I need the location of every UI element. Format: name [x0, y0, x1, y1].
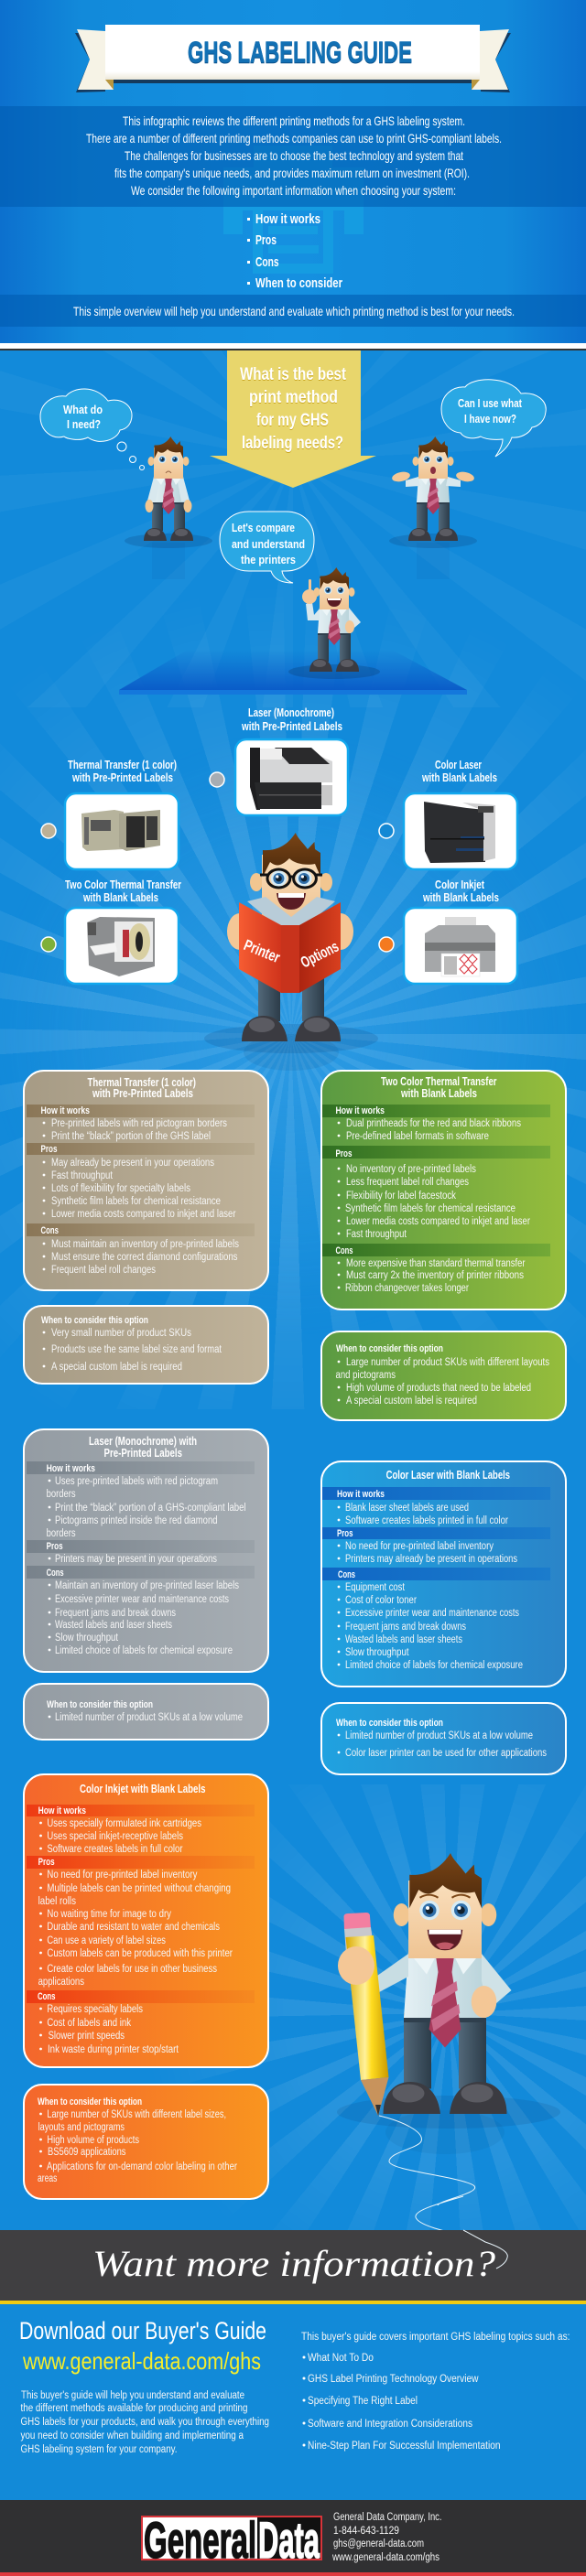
- pros: Can use a variety of label sizes: [47, 1935, 166, 1946]
- panel title: Thermal Transfer (1 color): [88, 1076, 196, 1089]
- panel: two color when to consider: and pictograms: [335, 1370, 396, 1381]
- cons: Ribbon changeover takes longer: [345, 1283, 469, 1294]
- pros: Durable and resistant to water and chemicals: [47, 1922, 220, 1933]
- pros: No need for pre-printed label inventory: [345, 1541, 494, 1552]
- panel: color laser when to consider: When to consider this option: [336, 1718, 443, 1729]
- book cover: Printer: [242, 936, 283, 966]
- cons: Cons: [40, 1225, 59, 1236]
- pros: Pros: [38, 1857, 55, 1868]
- printer card: two color thermal: [65, 908, 179, 984]
- how it works: Dual printheads for the red and black ribbons: [346, 1118, 521, 1129]
- consideration list: Cons: [255, 254, 278, 270]
- speech bubble: compare: Let's compare: [232, 522, 295, 534]
- contact details: General Data Company, Inc.: [333, 2512, 441, 2523]
- printer label: color inkjet: Color Inkjet: [435, 878, 485, 891]
- pros: Lower media costs compared to inkjet and laser: [346, 1216, 530, 1227]
- how it works: [38, 1805, 201, 1855]
- cons: Ink waste during printer stop/start: [48, 2044, 179, 2055]
- guide description: [20, 2390, 269, 2455]
- printer label: color inkjet: [422, 878, 499, 904]
- pros: Pros: [47, 1541, 63, 1552]
- cons: Limited choice of labels for chemical exposure: [55, 1645, 233, 1656]
- logo: General: [144, 2511, 256, 2569]
- how it works: Uses special inkjet-receptive labels: [47, 1831, 183, 1842]
- panel: color inkjet when to consider: areas: [38, 2173, 58, 2184]
- panel: color inkjet when to consider: Applications for on-demand color labeling in other: [47, 2161, 237, 2172]
- cons: Frequent label roll changes: [51, 1265, 156, 1276]
- guide topics: What Not To Do: [308, 2353, 374, 2364]
- thought bubble: What do: [63, 403, 103, 416]
- cons: Must carry 2x the inventory of printer ribbons: [346, 1270, 524, 1281]
- panel title: Two Color Thermal Transfer: [381, 1075, 497, 1088]
- book cover: Options: [298, 938, 342, 972]
- panel: color inkjet: [24, 1774, 268, 2067]
- pros: Pros: [337, 1528, 353, 1539]
- printer label: thermal transfer: with Pre-Printed Labels: [71, 771, 173, 784]
- question arrow: What is the best: [240, 365, 347, 384]
- question arrow: print method: [249, 388, 338, 407]
- panel title: with Blank Labels: [400, 1087, 477, 1100]
- printer label: color laser: with Blank Labels: [421, 771, 497, 784]
- pros: May already be present in your operations: [51, 1158, 214, 1169]
- speech bubble: compare: and understand: [232, 538, 305, 551]
- printer card: color inkjet: [404, 908, 517, 984]
- pros: Pros: [40, 1144, 57, 1155]
- cons: Must maintain an inventory of pre-printed labels: [51, 1239, 239, 1250]
- speech bubble: can I use: [441, 380, 546, 457]
- guide topics: [301, 2332, 570, 2452]
- pros: applications: [38, 1977, 84, 1988]
- status dot: green: [41, 937, 56, 952]
- pros: Fast throughput: [346, 1229, 407, 1240]
- panel: color inkjet when to consider: Large number of SKUs with different label sizes,: [47, 2109, 226, 2120]
- cons: Equipment cost: [345, 1582, 406, 1593]
- panel: color inkjet when to consider: When to consider this option: [38, 2096, 142, 2107]
- cons: Cons: [338, 1569, 355, 1580]
- cons: [40, 1225, 239, 1276]
- intro text: [86, 113, 502, 198]
- panel: laser monochrome when to consider: [24, 1684, 268, 1740]
- pros: Create color labels for use in other business: [47, 1964, 217, 1975]
- pros: Printers may be present in your operations: [55, 1554, 217, 1565]
- question arrow: [210, 350, 376, 488]
- how it works: [335, 1105, 521, 1142]
- pros: Pros: [335, 1148, 352, 1159]
- cons: Slow throughput: [55, 1633, 119, 1644]
- how it works: How it works: [38, 1805, 86, 1816]
- pros: Custom labels can be produced with this printer: [47, 1948, 233, 1959]
- how it works: Software creates labels printed in full color: [345, 1515, 508, 1526]
- panel: two color when to consider: High volume of products that need to be labeled: [346, 1383, 531, 1394]
- cons: Excessive printer wear and maintenance costs: [345, 1608, 519, 1619]
- printer label: two color thermal: [65, 878, 181, 904]
- guide topics: Software and Integration Considerations: [308, 2419, 472, 2430]
- pros: No inventory of pre-printed labels: [346, 1164, 476, 1175]
- how it works: Uses specially formulated ink cartridges: [47, 1818, 201, 1829]
- buyer's guide section: [0, 2304, 586, 2500]
- consideration list: When to consider: [255, 275, 342, 291]
- speech bubble: can I use: Can I use what: [458, 397, 523, 410]
- printer label: color inkjet: with Blank Labels: [422, 891, 499, 904]
- panel: color inkjet when to consider: High volume of products: [47, 2135, 139, 2146]
- pros: [335, 1148, 530, 1240]
- pros: Lots of flexibility for specialty labels: [51, 1183, 190, 1194]
- conclusion band: [0, 295, 586, 327]
- intro text: The challenges for businesses are to choose the best technology and system that: [125, 148, 463, 163]
- panel title: Color Inkjet with Blank Labels: [80, 1783, 206, 1795]
- guide description: GHS labeling system for your company.: [20, 2444, 178, 2455]
- printer label: thermal transfer: [68, 759, 177, 784]
- panel title: [88, 1076, 196, 1100]
- panel: two color when to consider: [321, 1331, 566, 1420]
- pros: Printers may already be present in operations: [345, 1554, 517, 1565]
- panel: two color thermal transfer: [321, 1071, 566, 1310]
- panel: color inkjet when to consider: [24, 2085, 268, 2199]
- panel: two color when to consider: A special custom label is required: [346, 1396, 477, 1407]
- how it works: How it works: [337, 1489, 385, 1500]
- cons: Slower print speeds: [49, 2031, 125, 2042]
- printer card: thermal transfer: [65, 793, 179, 869]
- guide description: the different methods available for producing and printing: [20, 2403, 247, 2414]
- pros: [38, 1857, 233, 1988]
- how it works: Pictograms printed inside the red diamond: [55, 1515, 218, 1526]
- panel title: [89, 1435, 197, 1460]
- want more information band: Want more information?: [92, 2243, 495, 2284]
- printer label: two color thermal: with Blank Labels: [82, 891, 158, 904]
- reader with printer options book: [204, 833, 378, 1071]
- cons: More expensive than standard thermal transfer: [346, 1258, 526, 1269]
- printer label: color laser: Color Laser: [435, 759, 482, 771]
- pros: Lower media costs compared to inkjet and laser: [51, 1209, 236, 1220]
- question arrow: for my GHS: [256, 411, 329, 430]
- intro band: [0, 106, 586, 207]
- panel title: Laser (Monochrome) with: [89, 1435, 197, 1448]
- cons: Limited choice of labels for chemical exposure: [345, 1660, 523, 1671]
- panel: thermal transfer when to consider: Very small number of product SKUs: [51, 1328, 191, 1339]
- intro text: This infographic reviews the different printing methods for a GHS labeling system.: [123, 113, 465, 128]
- panel title: Pre-Printed Labels: [104, 1447, 182, 1460]
- guide description: you need to consider when building and implementing a: [20, 2430, 244, 2441]
- how it works: Print the “black” portion of the GHS label: [51, 1131, 211, 1142]
- printer label: thermal transfer: Thermal Transfer (1 color): [68, 759, 177, 771]
- panel title: [381, 1075, 497, 1100]
- book cover: [239, 902, 342, 993]
- printer label: two color thermal: Two Color Thermal Transfer: [65, 878, 181, 891]
- cons: Maintain an inventory of pre-printed laser labels: [55, 1580, 239, 1591]
- printer label: laser monochrome: Laser (Monochrome): [248, 706, 334, 719]
- cons: Slow throughput: [345, 1647, 409, 1658]
- printer label: laser monochrome: [241, 706, 342, 733]
- how it works: Pre-printed labels with red pictogram borders: [51, 1118, 227, 1129]
- panel: two color when to consider: When to consider this option: [336, 1343, 443, 1354]
- contact details: ghs@general-data.com: [333, 2538, 424, 2549]
- cons: Frequent jams and break downs: [55, 1608, 176, 1619]
- thought bubble: I need?: [67, 417, 101, 431]
- cons: [335, 1245, 526, 1294]
- man: shrugging: [389, 437, 477, 579]
- panel: thermal transfer when to consider: When to consider this option: [41, 1315, 148, 1326]
- how it works: How it works: [47, 1463, 95, 1474]
- guide topics: GHS Label Printing Technology Overview: [308, 2374, 479, 2385]
- panel: two color when to consider: Large number of product SKUs with different layouts: [346, 1357, 549, 1368]
- cons: Cons: [47, 1568, 64, 1579]
- cons: [38, 1991, 179, 2055]
- pros: Less frequent label roll changes: [346, 1177, 469, 1188]
- how it works: borders: [47, 1528, 76, 1539]
- cons: Wasted labels and laser sheets: [55, 1620, 172, 1631]
- panel: color inkjet when to consider: layouts and pictograms: [38, 2122, 125, 2133]
- how it works: Blank laser sheet labels are used: [345, 1503, 469, 1514]
- panel: thermal transfer when to consider: [24, 1306, 268, 1384]
- title: GHS LABELING GUIDE: [188, 36, 412, 69]
- footer: [0, 2500, 586, 2576]
- guide url: www.general-data.com/ghs: [22, 2347, 261, 2375]
- consideration list: How it works: [255, 211, 320, 227]
- speech bubble: can I use: I have now?: [464, 413, 516, 426]
- cons: Requires specialty labels: [47, 2004, 143, 2015]
- guide topics: Specifying The Right Label: [308, 2396, 418, 2407]
- question arrow: labeling needs?: [242, 434, 343, 453]
- status dot: blue: [379, 824, 394, 838]
- logo: Data: [258, 2511, 320, 2569]
- platform: [119, 650, 467, 695]
- icon: pencil: [344, 1913, 388, 2116]
- cons: [47, 1568, 239, 1656]
- pros: No need for pre-printed label inventory: [47, 1870, 198, 1881]
- how it works: [40, 1105, 227, 1142]
- how it works: Uses pre-printed labels with red pictogram: [55, 1476, 218, 1487]
- pros: Synthetic film labels for chemical resistance: [51, 1196, 221, 1207]
- status dot: orange: [379, 937, 394, 952]
- panel: laser monochrome: [24, 1429, 268, 1672]
- panel: thermal transfer when to consider: A special custom label is required: [51, 1362, 182, 1373]
- how it works: borders: [47, 1489, 76, 1500]
- how it works: [47, 1463, 246, 1539]
- how it works: How it works: [40, 1105, 90, 1116]
- printer label: laser monochrome: with Pre-Printed Labels: [241, 720, 342, 733]
- cons: Must ensure the correct diamond configurations: [51, 1252, 238, 1263]
- printer label: color laser: [421, 759, 497, 784]
- speech bubble: compare: [220, 512, 314, 583]
- title ribbon: [75, 25, 511, 92]
- cons: [338, 1569, 523, 1671]
- panel: laser monochrome when to consider: When to consider this option: [47, 1699, 153, 1710]
- guide topics: Nine-Step Plan For Successful Implementation: [308, 2441, 500, 2452]
- pros: Flexibility for label facestock: [346, 1191, 456, 1202]
- section divider: [0, 343, 586, 350]
- panel: color laser when to consider: Limited number of product SKUs at a low volume: [345, 1730, 533, 1741]
- pros: label rolls: [38, 1896, 76, 1907]
- man: confused: [125, 437, 212, 579]
- panel: laser monochrome when to consider: Limited number of product SKUs at a low volume: [55, 1712, 243, 1723]
- pros: No waiting time for image to dry: [47, 1909, 171, 1920]
- consideration list: Pros: [255, 232, 277, 248]
- contact details: www.general-data.com/ghs: [331, 2552, 440, 2563]
- pros: [40, 1144, 236, 1220]
- how it works: Pre-defined label formats in software: [346, 1131, 489, 1142]
- status dot: grey: [210, 772, 224, 787]
- panel: thermal transfer when to consider: Products use the same label size and format: [51, 1344, 222, 1355]
- cons: Cons: [38, 1991, 55, 2002]
- consideration list: [247, 211, 342, 291]
- panel title: Color Laser with Blank Labels: [386, 1469, 510, 1482]
- contact details: 1-844-643-1129: [333, 2526, 399, 2537]
- printer card: color laser: [404, 793, 517, 869]
- thought bubble: [40, 389, 145, 470]
- intro text: We consider the following important information when choosing your system:: [131, 183, 456, 198]
- panel: color laser when to consider: [321, 1703, 566, 1774]
- man: pointing: [288, 567, 380, 679]
- pros: Synthetic film labels for chemical resistance: [345, 1203, 515, 1214]
- cons: Cost of color toner: [345, 1595, 417, 1606]
- panel: thermal transfer: [24, 1071, 268, 1290]
- want more information band: [0, 2230, 586, 2304]
- how it works: [337, 1489, 508, 1526]
- cons: Cons: [335, 1245, 353, 1256]
- panel: color laser: [321, 1461, 566, 1687]
- guide heading: Download our Buyer's Guide: [19, 2317, 266, 2344]
- how it works: Print the “black” portion of a GHS-compliant label: [55, 1503, 246, 1514]
- cons: Excessive printer wear and maintenance costs: [55, 1594, 229, 1605]
- printer card: laser monochrome: [235, 739, 348, 815]
- contact details: [331, 2512, 441, 2563]
- pros: [47, 1541, 217, 1565]
- intro text: fits the company's unique needs, and provides maximum return on investment (ROI).: [114, 166, 470, 180]
- printer watermark: [223, 146, 364, 274]
- how it works: Software creates labels in full color: [47, 1844, 183, 1855]
- pros: [337, 1528, 517, 1565]
- panel: color laser when to consider: Color laser printer can be used for other applications: [345, 1748, 547, 1759]
- guide description: GHS labels for your products, and walk you through everything: [20, 2417, 269, 2428]
- squiggle line: [379, 2116, 507, 2269]
- pros: Multiple labels can be printed without changing: [47, 1883, 231, 1894]
- panel title: with Pre-Printed Labels: [92, 1087, 193, 1100]
- how it works: How it works: [335, 1105, 385, 1116]
- status dot: tan: [41, 824, 56, 838]
- cons: Frequent jams and break downs: [345, 1622, 466, 1633]
- pencil man: [337, 1853, 560, 2154]
- guide description: This buyer's guide will help you understand and evaluate: [21, 2390, 244, 2401]
- pros: Fast throughput: [51, 1170, 114, 1181]
- cons: Wasted labels and laser sheets: [345, 1634, 462, 1645]
- speech bubble: compare: the printers: [241, 554, 296, 566]
- cons: Cost of labels and ink: [47, 2018, 131, 2029]
- panel: color inkjet when to consider: BS5609 applications: [48, 2147, 126, 2158]
